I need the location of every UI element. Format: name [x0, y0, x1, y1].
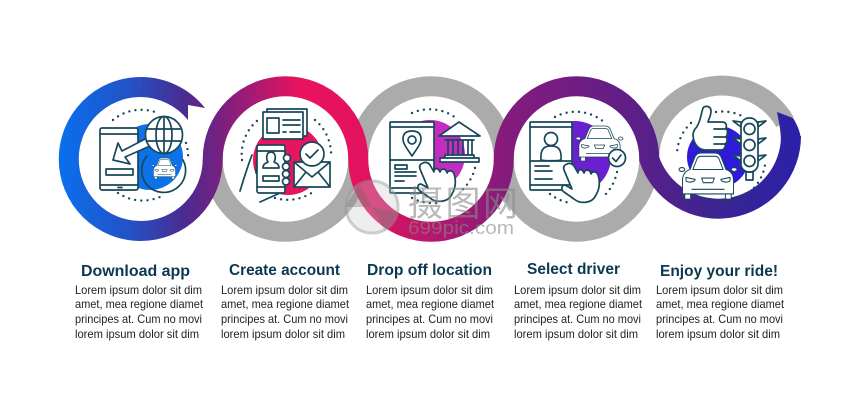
step 1 text: principes at. Cum no movi: [75, 312, 202, 326]
step 5 text: lorem ipsum dolor sit dim: [656, 327, 780, 341]
step 2 text: principes at. Cum no movi: [221, 312, 348, 326]
watermark logo: [345, 181, 398, 233]
step 3 text: lorem ipsum dolor sit dim: [366, 327, 490, 341]
phone: [530, 122, 572, 190]
step 2 text: Lorem ipsum dolor sit dim: [221, 283, 348, 297]
ribbon end: [777, 112, 801, 143]
arrow: [113, 138, 150, 164]
step 4 text: principes at. Cum no movi: [514, 312, 641, 326]
step 2 text: amet, mea regione diamet: [221, 297, 350, 311]
bank: [439, 122, 480, 136]
step 3 text: Drop off location: [367, 262, 492, 279]
car: [679, 153, 737, 199]
traffic light: [733, 121, 766, 161]
step 1 text: lorem ipsum dolor sit dim: [75, 327, 199, 341]
step 5 text: principes at. Cum no movi: [656, 312, 783, 326]
step 4 text: lorem ipsum dolor sit dim: [514, 327, 638, 341]
watermark: [345, 181, 518, 238]
watermark url: 699pic.com: [408, 218, 514, 238]
step 5 text: amet, mea regione diamet: [656, 297, 785, 311]
step 3 text: amet, mea regione diamet: [366, 297, 495, 311]
step 4 text: Lorem ipsum dolor sit dim: [514, 283, 641, 297]
envelope: [294, 162, 330, 187]
step 4 text: [514, 261, 643, 341]
thumb up: [693, 106, 728, 150]
icon: create account: [240, 109, 331, 202]
icon: drop off location: [390, 109, 480, 203]
check badge: [300, 142, 324, 166]
step 5 text: Enjoy your ride!: [660, 263, 778, 280]
step 5 text: Lorem ipsum dolor sit dim: [656, 283, 783, 297]
icon: select driver: [530, 112, 626, 203]
step 3 text: principes at. Cum no movi: [366, 312, 493, 326]
arrow head: [140, 77, 205, 120]
clock ring: [142, 156, 186, 192]
step 2 text: Create account: [229, 262, 340, 279]
check badge: [608, 150, 626, 166]
icon: enjoy your ride: [677, 106, 766, 202]
step 1 text: amet, mea regione diamet: [75, 297, 204, 311]
phone: [100, 128, 138, 190]
phone: [390, 122, 434, 193]
step 3 text: [366, 262, 495, 341]
step 1 text: Download app: [81, 263, 190, 280]
step 4 text: Select driver: [527, 261, 620, 278]
icon: download app: [100, 110, 188, 201]
step 1 text: [75, 263, 204, 341]
phone: [257, 145, 285, 193]
cards: [267, 109, 307, 136]
step 4 text: amet, mea regione diamet: [514, 297, 643, 311]
step 3 text: Lorem ipsum dolor sit dim: [366, 283, 493, 297]
step 1 text: Lorem ipsum dolor sit dim: [75, 283, 202, 297]
grey ribbon background: [213, 86, 785, 232]
step 2 text: [221, 262, 350, 341]
step 2 text: lorem ipsum dolor sit dim: [221, 327, 345, 341]
gradient ribbon with arrow: [69, 77, 801, 232]
watermark text: 摄图网: [408, 185, 518, 224]
step 5 text: [656, 263, 785, 341]
globe: [146, 116, 182, 154]
car: [576, 126, 623, 161]
hand outline: [240, 155, 280, 202]
